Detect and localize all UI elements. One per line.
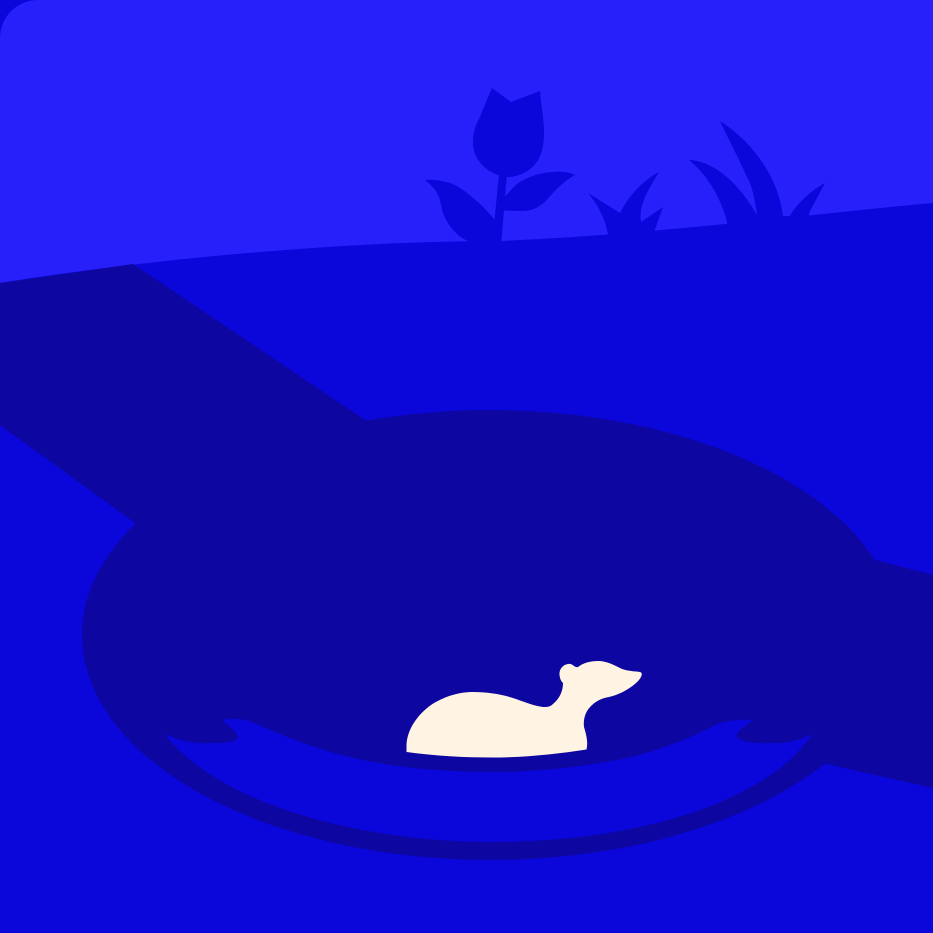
burrow: tunnels and chamber [0,264,933,860]
burrow: right tunnel [822,559,933,788]
burrow: chamber [82,410,898,860]
icon: right leaf [502,172,575,211]
icon: tulip stem [492,174,507,245]
panel: sky with rounded corner [0,0,933,300]
ground: hill surface [0,203,933,933]
icon: left leaf [425,180,495,245]
burrow: left tunnel [0,264,368,525]
icon: tall grass silhouette [689,121,825,232]
icon: tulip head [473,88,544,177]
icon: tulip plant silhouette [425,88,575,245]
icon: small grass silhouette [588,172,663,235]
animal: cream ferret silhouette [406,661,642,758]
burrow: chamber floor [164,719,812,842]
